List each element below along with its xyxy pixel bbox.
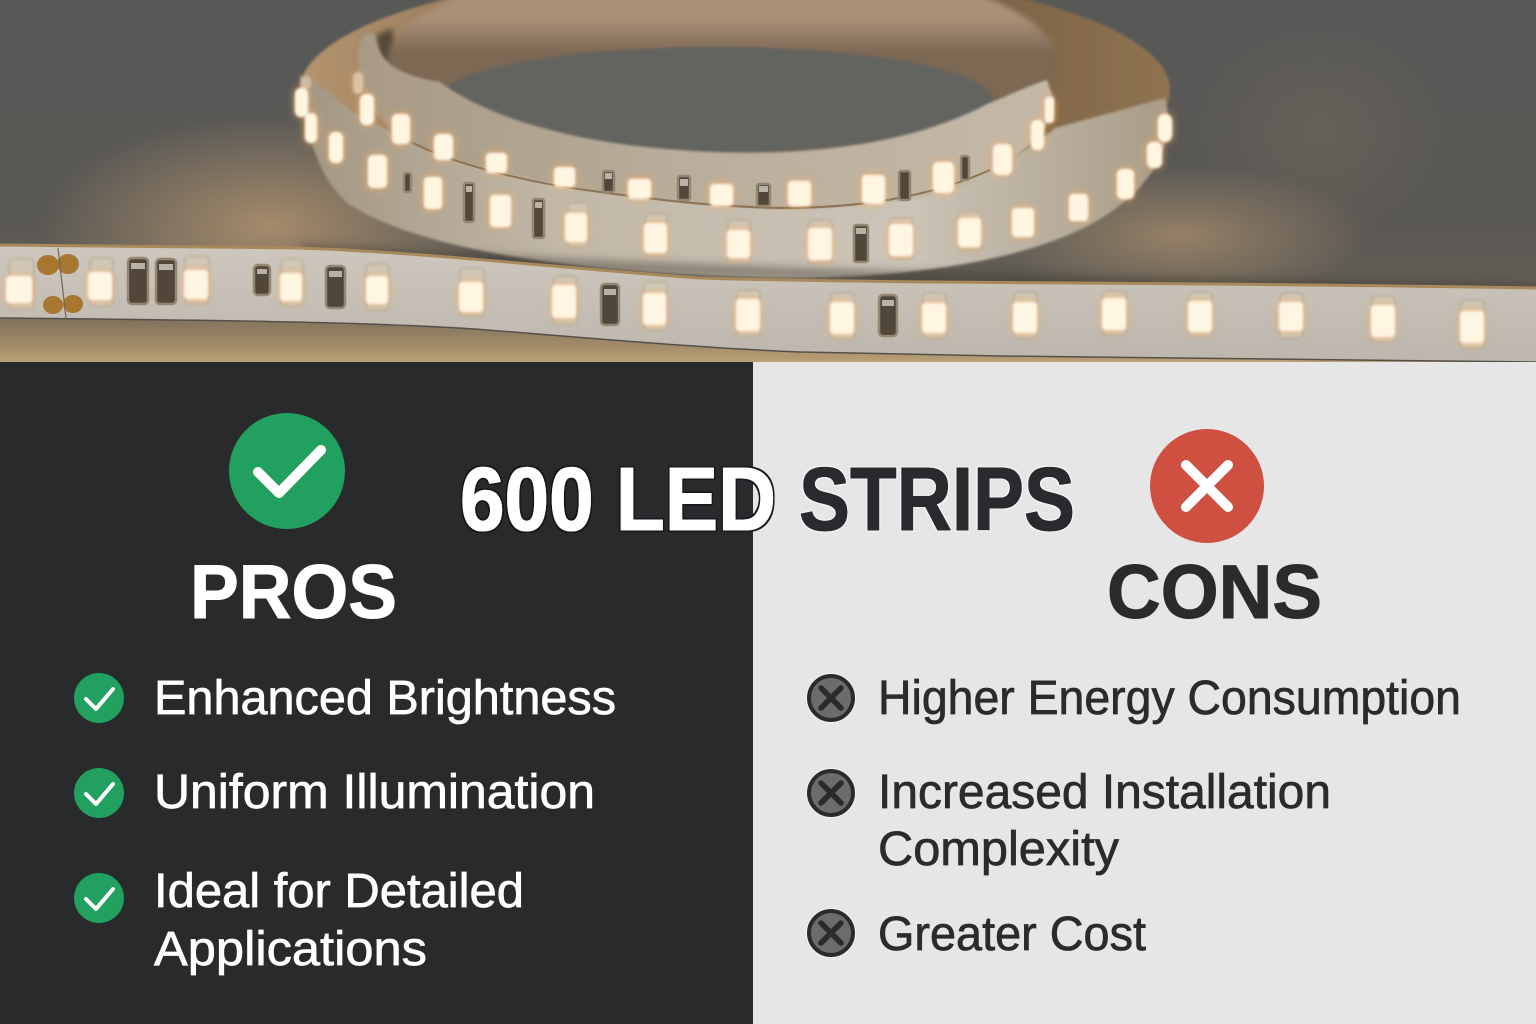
heading: pros: PROS [190, 550, 397, 635]
con item: increased installation complexity: Complexity [878, 823, 1119, 876]
icon: large red cross [1150, 429, 1264, 543]
middle strip face [300, 75, 1168, 278]
pro item: uniform illumination: Uniform Illumination [154, 766, 595, 819]
copper solder pads [37, 254, 83, 314]
SMD highlights [131, 173, 894, 306]
dark SMD components [128, 156, 969, 336]
con item: higher energy consumption: Higher Energy Consumption [878, 672, 1461, 725]
glowing LEDs [6, 72, 1484, 343]
cons list [806, 672, 1461, 961]
heading: cons: CONS [1107, 550, 1322, 635]
title right part: STRIPS: STRIPS [799, 450, 1075, 550]
panel: cons background [753, 362, 1536, 1024]
con item: increased installation complexity [806, 766, 1331, 876]
title left part: 600 LED: 600 LED [460, 450, 776, 550]
front strip [0, 245, 1536, 362]
pro item: ideal for detailed applications: Applications [154, 923, 427, 976]
pro item: ideal for detailed applications [74, 865, 524, 976]
LED housings [9, 203, 1484, 348]
title [460, 450, 1075, 550]
coil back and inner faces [299, 0, 1172, 154]
con item: greater cost: Greater Cost [878, 908, 1146, 961]
pro item: enhanced brightness: Enhanced Brightness [154, 672, 616, 725]
pro item: ideal for detailed applications: Ideal for Detailed [154, 865, 524, 918]
front strip shadow [300, 250, 1536, 290]
upper strip face [358, 33, 1054, 208]
panel: pros background [0, 362, 753, 1024]
strip edge lines [413, 143, 990, 208]
icon: large green check [229, 413, 345, 529]
photo: LED strip coil [0, 0, 1536, 362]
pros list [74, 672, 616, 976]
surface background [0, 0, 1536, 286]
con item: increased installation complexity: Increased Installation [878, 766, 1331, 819]
